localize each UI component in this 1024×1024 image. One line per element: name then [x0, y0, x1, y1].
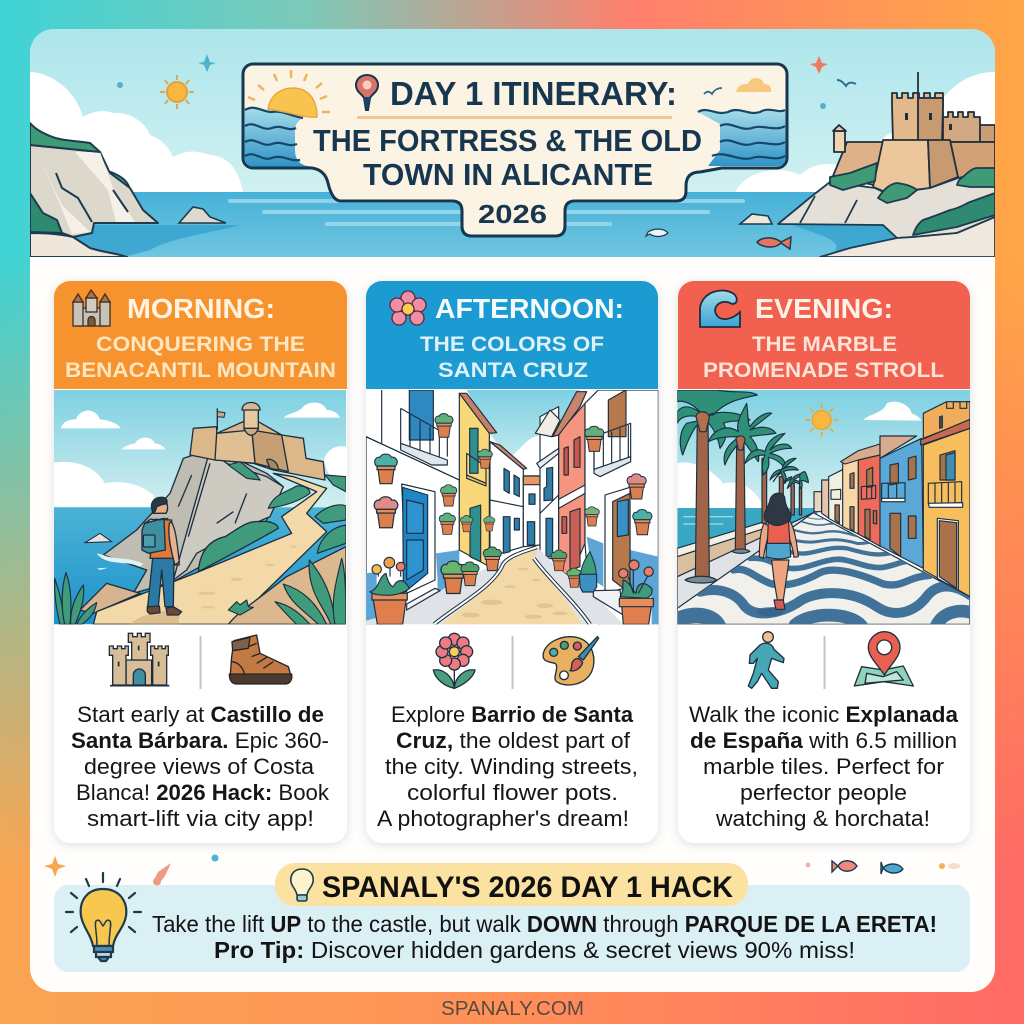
afternoon body text: A photographer's dream! [377, 806, 629, 831]
panel: evening [677, 281, 973, 843]
title line 1: DAY 1 ITINERARY: [390, 75, 677, 112]
right cliffs [778, 163, 995, 257]
morning body text: smart-lift via city app! [87, 806, 314, 831]
right rock [740, 214, 772, 224]
illustration: Santa Cruz street [366, 390, 658, 625]
dot blue right [820, 103, 826, 109]
hack title: SPANALY'S 2026 DAY 1 HACK [322, 871, 734, 904]
title plaque [243, 64, 787, 236]
decorative dot [212, 854, 218, 862]
afternoon body text: the city. Winding streets, [385, 754, 638, 779]
evening header [678, 281, 970, 389]
evening body text: watching & horchata! [715, 806, 930, 831]
wave lines [245, 108, 785, 160]
bird [837, 80, 856, 86]
decorative comet [153, 863, 171, 885]
sparkle blue [198, 54, 216, 72]
evening title: EVENING: [755, 293, 893, 324]
fish blue [646, 229, 668, 236]
title divider [357, 116, 672, 119]
icon: small flower [390, 291, 426, 325]
evening body text: de España with 6.5 million [690, 728, 957, 753]
decorative dot left of fish [806, 862, 810, 868]
fish red [757, 237, 791, 249]
morning subtitle 2: BENACANTIL MOUNTAIN [65, 358, 336, 382]
plaque outline [243, 64, 787, 236]
afternoon body text: Cruz, the oldest part of [396, 728, 631, 753]
callout background [54, 885, 970, 972]
afternoon body text: colorful flower pots. [407, 780, 618, 805]
dot blue [117, 82, 123, 88]
afternoon body text [377, 702, 638, 831]
icon: small castle [73, 290, 110, 326]
morning body text: Start early at Castillo de [77, 702, 324, 727]
panel: header scene [30, 29, 995, 257]
sun in scene [805, 403, 838, 437]
icon: castle [109, 633, 169, 686]
panel: afternoon [366, 281, 658, 843]
afternoon subtitle 1: THE COLORS OF [420, 332, 604, 356]
hack line 2: Pro Tip: Discover hidden gardens & secret views 90% miss! [214, 937, 855, 963]
card body [678, 281, 970, 843]
icon: flower [433, 633, 475, 688]
morning subtitle 1: CONQUERING THE [96, 332, 305, 356]
afternoon body text: Explore Barrio de Santa [391, 702, 634, 727]
title line 2: THE FORTRESS & THE OLD [313, 123, 702, 158]
castle fortress [833, 72, 995, 193]
panel: morning [54, 281, 347, 843]
title year: 2026 [478, 199, 547, 229]
evening body text [689, 702, 959, 831]
morning title: MORNING: [127, 293, 275, 324]
icon: walker [748, 632, 784, 688]
divider [512, 636, 514, 689]
sea shade [76, 225, 895, 256]
panel: hack callout [44, 854, 970, 972]
wave band right [698, 110, 786, 166]
afternoon title: AFTERNOON: [435, 293, 624, 324]
left cliff [30, 123, 158, 257]
morning body text [71, 702, 330, 831]
icon: palette [543, 637, 599, 685]
sparkle coral [810, 56, 828, 74]
morning body text: degree views of Costa [84, 754, 315, 779]
icon: bulb large [66, 873, 141, 961]
icon: boot [229, 635, 292, 684]
afternoon header [366, 281, 658, 389]
sun icon [160, 75, 194, 109]
illustration: marble promenade [677, 390, 973, 626]
evening subtitle 2: PROMENADE STROLL [703, 358, 944, 382]
footer site name: SPANALY.COM [441, 998, 584, 1020]
castle windows [905, 113, 952, 130]
fish coral [832, 861, 857, 872]
sea [76, 192, 895, 257]
afternoon subtitle 2: SANTA CRUZ [438, 358, 588, 382]
decorative dashes [939, 863, 960, 869]
clouds [30, 72, 995, 193]
hack title pill [275, 863, 748, 906]
sea streaks [228, 199, 745, 226]
evening body text: perfector people [740, 780, 907, 805]
card body [54, 281, 347, 843]
plaque cloud [736, 78, 771, 92]
plaque bird [704, 88, 722, 94]
divider [200, 636, 202, 689]
evening body text: marble tiles. Perfect for [703, 754, 944, 779]
wave band left [244, 108, 312, 167]
evening body text: Walk the iconic Explanada [689, 702, 959, 727]
card body [366, 281, 658, 843]
icon: bulb small [291, 869, 313, 901]
morning body text: Blanca! 2026 Hack: Book [76, 780, 330, 805]
illustration: castle hike [54, 390, 346, 624]
icon: wave [700, 290, 740, 327]
icon: map pin [854, 632, 913, 686]
left rock [179, 207, 226, 223]
fish blue [881, 862, 903, 874]
location pin [356, 75, 378, 110]
evening subtitle 1: THE MARBLE [752, 332, 897, 356]
plaque sun [248, 70, 330, 117]
morning body text: Santa Bárbara. Epic 360- [71, 728, 329, 753]
title line 3: TOWN IN ALICANTE [363, 157, 653, 192]
decorative sparkle [44, 856, 66, 877]
divider [824, 636, 826, 689]
morning header [54, 281, 347, 389]
hack line 1: Take the lift UP to the castle, but walk DOWN through PARQUE DE LA ERETA! [152, 911, 937, 937]
